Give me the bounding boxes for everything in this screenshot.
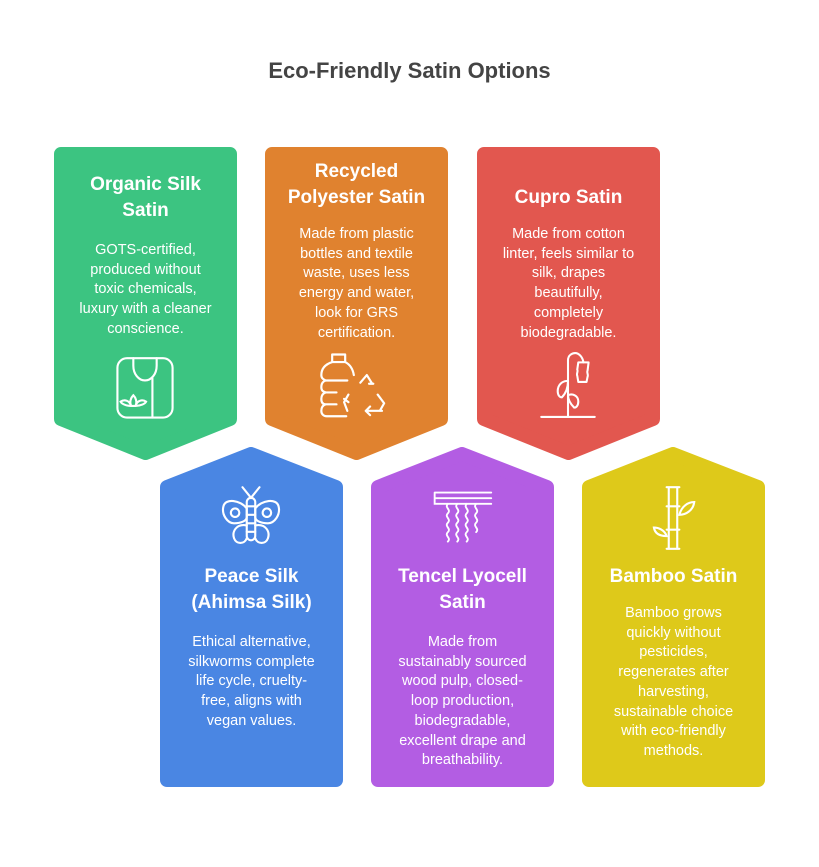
panel: peace silk: [160, 447, 343, 787]
text: linter, feels similar to: [503, 246, 634, 262]
text: look for GRS: [315, 305, 398, 321]
icon: wilting plant: [540, 352, 596, 418]
title: Eco-Friendly Satin Options: [268, 58, 551, 83]
text: free, aligns with: [201, 693, 302, 709]
text: energy and water,: [299, 285, 414, 301]
text: Made from: [428, 634, 497, 650]
heading: Cupro Satin: [515, 187, 622, 208]
icon: bottle and recycle: [320, 353, 386, 418]
text: [79, 242, 212, 337]
text: quickly without: [626, 625, 721, 641]
text: luxury with a cleaner: [79, 301, 212, 317]
text: [398, 634, 527, 768]
text: pesticides,: [639, 644, 708, 660]
heading: Satin: [439, 592, 486, 613]
text: excellent drape and: [399, 733, 526, 749]
text: bottles and textile: [300, 246, 413, 262]
panel: organic silk satin: [54, 147, 237, 460]
text: silkworms complete: [188, 654, 315, 670]
icon: butterfly: [222, 486, 280, 544]
text: harvesting,: [638, 684, 709, 700]
text: [188, 634, 315, 729]
text: with eco-friendly: [621, 723, 726, 739]
text: wood pulp, closed-: [402, 673, 523, 689]
text: life cycle, cruelty-: [196, 673, 307, 689]
text: [299, 226, 414, 341]
heading: Satin: [122, 200, 169, 221]
heading: [288, 161, 425, 208]
text: produced without: [90, 262, 201, 278]
panel: tencel lyocell satin: [371, 447, 554, 787]
text: Made from plastic: [299, 226, 414, 242]
text: [614, 605, 733, 759]
text: Made from cotton: [512, 226, 625, 242]
text: [503, 226, 634, 341]
heading: Bamboo Satin: [610, 566, 737, 587]
text: loop production,: [411, 693, 514, 709]
text: sustainable choice: [614, 704, 733, 720]
text: conscience.: [107, 321, 184, 337]
text: silk, drapes: [532, 265, 605, 281]
heading: Polyester Satin: [288, 187, 425, 208]
text: biodegradable.: [521, 325, 616, 341]
heading: [90, 174, 201, 221]
text: breathability.: [422, 752, 503, 768]
text: certification.: [318, 325, 395, 341]
heading: Recycled: [315, 161, 398, 182]
text: biodegradable,: [415, 713, 510, 729]
text: vegan values.: [207, 713, 296, 729]
text: waste, uses less: [303, 265, 410, 281]
heading: (Ahimsa Silk): [191, 592, 312, 613]
heading: Organic Silk: [90, 174, 201, 195]
text: regenerates after: [618, 664, 729, 680]
text: GOTS-certified,: [95, 242, 196, 258]
icon: garment with leaves: [116, 357, 174, 419]
text: Ethical alternative,: [192, 634, 311, 650]
text: methods.: [644, 743, 703, 759]
icon: bamboo: [652, 486, 696, 550]
text: sustainably sourced: [398, 654, 527, 670]
text: toxic chemicals,: [94, 281, 197, 297]
heading: [398, 566, 527, 613]
heading: Tencel Lyocell: [398, 566, 527, 587]
text: completely: [534, 305, 603, 321]
text: beautifully,: [534, 285, 603, 301]
panel: bamboo satin: [582, 447, 765, 787]
heading: [191, 566, 312, 613]
text: Bamboo grows: [625, 605, 722, 621]
icon: fibers: [434, 492, 492, 543]
panel: recycled polyester satin: [265, 147, 448, 460]
panel: cupro satin: [477, 147, 660, 460]
heading: Peace Silk: [204, 566, 299, 587]
